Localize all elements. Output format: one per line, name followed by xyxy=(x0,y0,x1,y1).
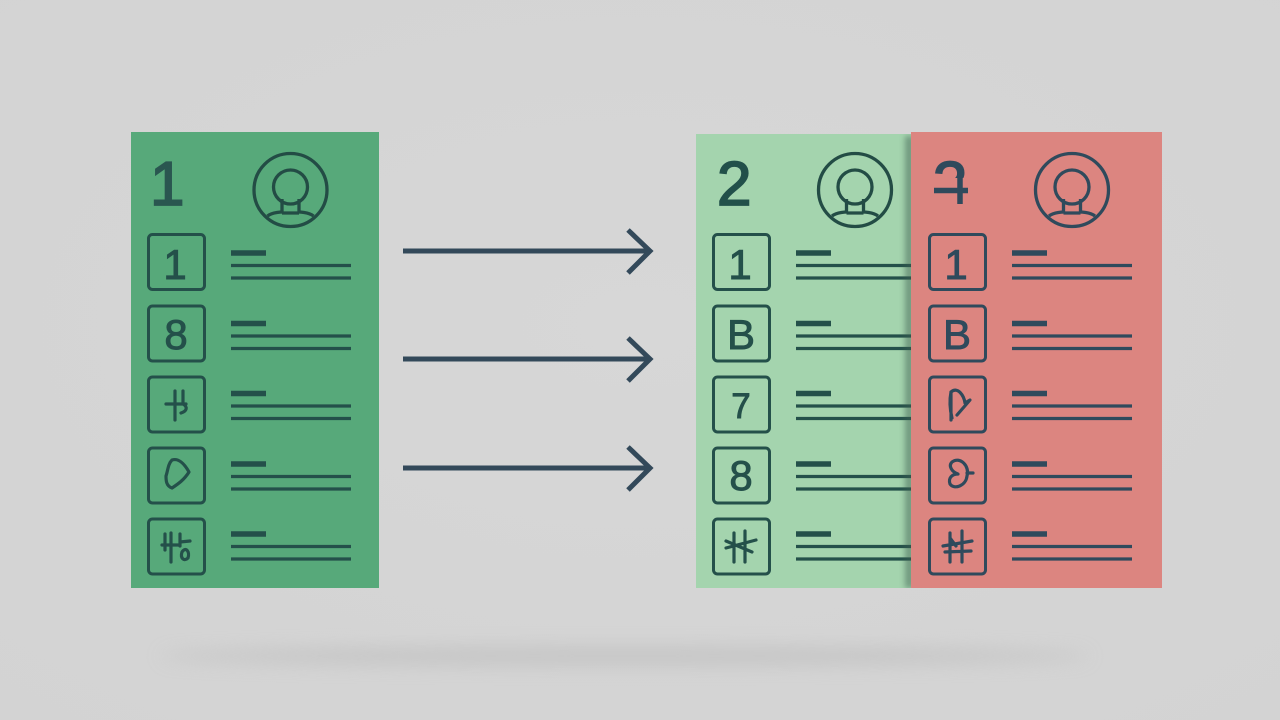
panel: card 1 xyxy=(131,132,379,588)
card 3 row 2 xyxy=(930,306,1132,361)
card 2 row 4 xyxy=(714,448,912,503)
card 2 row 3: 7 xyxy=(731,387,751,426)
card 2 row 2: B xyxy=(727,311,755,358)
arrow: bottom xyxy=(403,447,650,490)
card 3 row 2: B xyxy=(943,311,971,358)
card 2 row 1 xyxy=(714,234,912,290)
card 2 avatar icon xyxy=(818,154,892,226)
card 2 number: 2 xyxy=(717,150,751,219)
arrow: middle xyxy=(403,338,650,381)
card 2 row 2 xyxy=(714,306,912,361)
card 2 row 4: 8 xyxy=(729,452,753,499)
card 1 number: 1 xyxy=(150,150,184,219)
card 2 row 1: 1 xyxy=(728,241,752,288)
card 3 number: 3 xyxy=(933,150,967,219)
card 1 row 2 xyxy=(148,306,351,361)
card 3 number xyxy=(934,160,968,204)
card 3 row 4 xyxy=(930,448,1132,503)
card 1 row 1: 1 xyxy=(163,241,187,288)
card 2 row 5 xyxy=(714,519,912,574)
card 1 row 1 xyxy=(148,234,351,290)
card 3 row 3 xyxy=(930,377,1132,432)
card 1 row 5 xyxy=(148,519,351,574)
card 3 row 1 xyxy=(930,234,1132,290)
panel: card 3 xyxy=(905,132,1162,588)
card 3 avatar icon xyxy=(1036,154,1108,226)
panel: card 2 xyxy=(696,134,914,588)
card 3 row 1: 1 xyxy=(944,241,968,288)
card 3 row 5 xyxy=(930,519,1132,574)
card 1 row 3 xyxy=(148,377,351,432)
card 2 row 3 xyxy=(714,377,912,432)
card 1 avatar icon xyxy=(254,154,327,226)
arrow: top xyxy=(403,230,650,273)
ground shadow xyxy=(160,646,1090,666)
card 1 row 4 xyxy=(148,448,351,503)
card 1 row 2: 8 xyxy=(164,311,188,358)
